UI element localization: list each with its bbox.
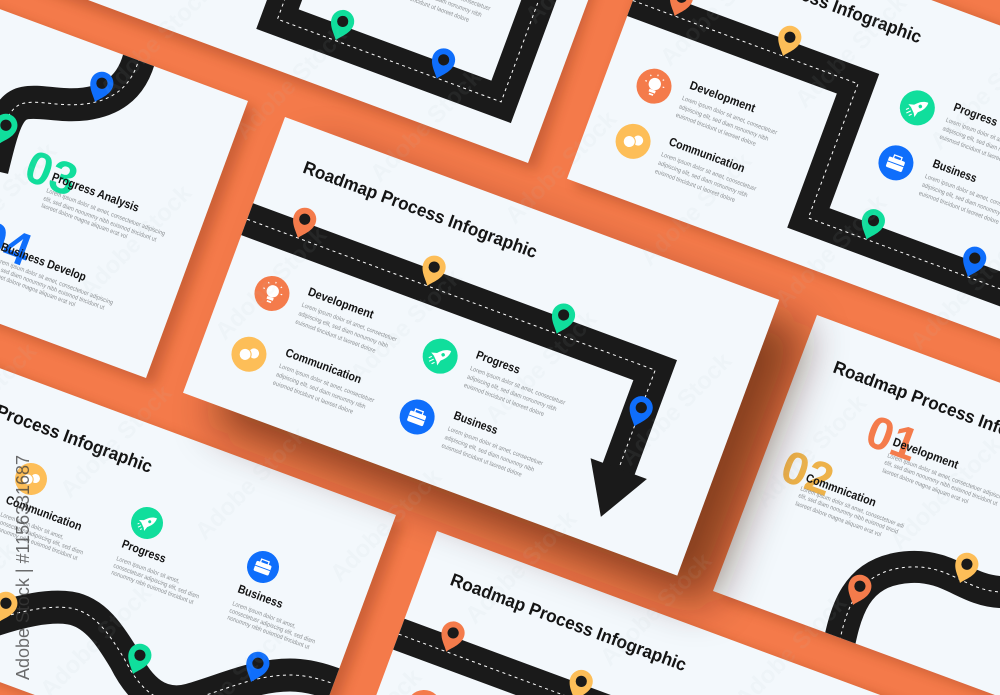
block: business: consectetuer adipiscing elit, sed diam bbox=[228, 607, 316, 645]
text: progress analysis description: Lorem ipsum dolor sit amet, consectetuer adipiscing bbox=[45, 187, 166, 238]
block: progress: Lorem ipsum dolor sit amet, consectetuer bbox=[469, 365, 566, 407]
pin: orange bbox=[664, 0, 696, 20]
pin: yellow bbox=[564, 667, 596, 695]
number 01: 01 bbox=[860, 405, 926, 471]
panel: top right slide bbox=[567, 0, 1000, 362]
pin: yellow bbox=[949, 549, 982, 587]
watermarks: Adobe Stock bbox=[500, 105, 623, 229]
icon: briefcase bbox=[242, 546, 284, 588]
block: progress: nonummy nibh euismod tincidunt ut bbox=[110, 569, 195, 606]
heading: Roadmap Process Infographic bbox=[300, 157, 540, 262]
block: communication: Lorem ipsum dolor sit amet, consectetuer bbox=[278, 363, 375, 404]
block: communication: Communication bbox=[4, 493, 84, 534]
block: communication: Lorem ipsum dolor sit amet, bbox=[0, 511, 65, 541]
watermarks: Adobe Stock bbox=[460, 505, 583, 629]
icon: rocket bbox=[895, 85, 940, 130]
block: development: Development bbox=[306, 284, 376, 321]
watermarks: Adobe Stock bbox=[480, 305, 603, 429]
watermarks: Adobe Stock bbox=[595, 547, 718, 671]
text: development description: laoreet dolore magna aliquam erat vol bbox=[881, 467, 969, 505]
heading: Roadmap Process Infographic bbox=[448, 570, 689, 675]
pin: blue bbox=[240, 648, 273, 686]
panel: left slide bbox=[0, 0, 248, 378]
block: progress: Lorem ipsum dolor sit amet, bbox=[115, 555, 181, 585]
pin: green bbox=[325, 7, 357, 44]
watermarks: Adobe Stock bbox=[55, 379, 178, 503]
number 03: 03 bbox=[19, 140, 85, 206]
panel: top middle slide bbox=[34, 0, 630, 163]
text: commnication description: elit, sed diam nonummy nibh euismod tincid bbox=[797, 492, 900, 536]
winding road bbox=[0, 607, 370, 695]
block: business: Business bbox=[452, 408, 500, 437]
pin: green bbox=[856, 206, 888, 243]
pin: yellow bbox=[772, 23, 805, 60]
pin: blue bbox=[84, 68, 117, 106]
icon: bulb bbox=[249, 271, 294, 316]
block: development: euismod tincidunt ut laoreet dolore bbox=[675, 112, 757, 148]
pin: blue bbox=[426, 45, 458, 83]
block: progress: euismod tincidunt ut laoreet dolore bbox=[463, 382, 545, 418]
text: commnication description: laoreet dolore magna aliquam erat vol bbox=[794, 500, 882, 538]
block: progress: consectetuer adipiscing elit, sed diam bbox=[112, 562, 200, 600]
block: business bbox=[918, 155, 1000, 232]
block: communication: Communication bbox=[667, 134, 747, 175]
block: communication bbox=[272, 345, 382, 421]
pin: orange bbox=[435, 618, 468, 656]
pin: orange bbox=[287, 204, 320, 242]
block: business: Lorem ipsum dolor sit amet, bbox=[231, 600, 297, 630]
text: progress analysis description: laoreet dolore magna aliquam erat vol bbox=[40, 202, 128, 240]
icon: briefcase bbox=[873, 140, 918, 185]
block: communication: euismod tincidunt ut laoreet dolore bbox=[654, 168, 736, 204]
block: business: nonummy nibh euismod tincidunt ut bbox=[226, 614, 311, 651]
heading: development: Development bbox=[891, 435, 961, 472]
watermarks: Adobe Stock bbox=[190, 421, 313, 545]
block: communication: euismod tincidunt ut laoreet dolore bbox=[272, 380, 354, 416]
block: business: Business bbox=[236, 582, 285, 611]
icon: rocket bbox=[418, 334, 463, 379]
watermarks: Adobe Stock bbox=[230, 21, 353, 145]
heading: progress analysis: Progress Analysis bbox=[50, 170, 141, 215]
panel: bottom left slide bbox=[0, 332, 396, 695]
text: commnication description: Lorem ipsum dolor sit amet, consectetuer adi bbox=[799, 485, 905, 530]
block: development bbox=[675, 77, 785, 153]
pin: green bbox=[546, 300, 578, 338]
watermarks: Adobe Stock bbox=[615, 347, 738, 471]
center slide shadow bbox=[213, 147, 809, 606]
block: development: Development bbox=[688, 78, 757, 115]
icon: bulb bbox=[632, 64, 677, 109]
block: communication: adipiscing elit, sed diam nonummy nibh bbox=[275, 371, 367, 411]
icon: briefcase bbox=[395, 394, 440, 439]
icon: chat bbox=[611, 119, 656, 164]
block: business bbox=[226, 582, 316, 651]
block: development: adipiscing elit, sed diam nonummy nibh bbox=[297, 310, 389, 350]
block: development: adipiscing elit, sed diam nonummy nibh bbox=[678, 103, 770, 143]
block: development: Lorem ipsum dolor sit amet, consectetuer bbox=[301, 302, 398, 343]
block: progress bbox=[110, 537, 200, 606]
pin: green bbox=[0, 110, 21, 148]
block: development: Lorem ipsum dolor sit amet, consectetuer bbox=[681, 95, 778, 136]
block: progress bbox=[938, 99, 1000, 175]
watermarks: Adobe Stock bbox=[345, 263, 468, 387]
block: communication: adipiscing elit, sed diam nonummy nibh bbox=[657, 160, 749, 199]
block: communication: Communication bbox=[284, 345, 364, 386]
panel: center slide bbox=[183, 117, 779, 576]
road with arrow bbox=[193, 219, 683, 527]
block: business: Lorem ipsum dolor sit amet, consectetuer bbox=[447, 426, 544, 467]
heading: business develop: Business Develop bbox=[0, 240, 88, 284]
pin: yellow bbox=[0, 588, 21, 626]
heading: commnication: Commnication bbox=[804, 471, 878, 509]
block: progress: Progress bbox=[120, 537, 168, 566]
watermarks: Adobe Stock bbox=[75, 179, 198, 303]
block: communication bbox=[654, 133, 764, 210]
block: business bbox=[440, 408, 550, 484]
block: development: euismod tincidunt ut laoreet dolore bbox=[294, 319, 377, 355]
pin: green bbox=[122, 640, 155, 678]
watermarks: Adobe Stock bbox=[750, 389, 873, 513]
block: development bbox=[294, 284, 404, 360]
road bbox=[583, 1, 1000, 317]
block: business: euismod tincidunt ut laoreet dolore bbox=[440, 442, 523, 479]
watermarks: Adobe Stock bbox=[635, 147, 758, 271]
block: communication: Lorem ipsum dolor sit amet, consectetuer bbox=[660, 151, 757, 193]
stock id text: Adobe Stock | #1156331687 bbox=[13, 455, 33, 680]
pin: blue bbox=[957, 243, 990, 281]
pin: blue bbox=[624, 393, 656, 430]
number 02: 02 bbox=[775, 440, 841, 506]
block: progress: adipiscing elit, sed diam nonummy nibh bbox=[466, 374, 558, 413]
watermarks: Adobe Stock bbox=[325, 463, 448, 587]
road bbox=[399, 634, 893, 695]
watermarks: Adobe Stock bbox=[365, 63, 488, 187]
icon: orange circle bbox=[401, 685, 446, 695]
block: progress bbox=[463, 347, 573, 424]
icon: chat bbox=[226, 332, 271, 377]
winding road bbox=[0, 45, 142, 170]
block: business: Business bbox=[931, 156, 979, 185]
roadmap road and text bbox=[277, 0, 552, 102]
block: business: adipiscing elit, sed diam nonummy nibh bbox=[444, 434, 536, 474]
panel: bottom center slide bbox=[335, 531, 931, 695]
panel: right slide bbox=[713, 315, 1000, 695]
block: communication bbox=[0, 493, 84, 562]
text: progress analysis description: elit, sed diam nonummy nibh euismod tincidunt ut bbox=[42, 195, 157, 244]
watermarks: Adobe Stock bbox=[770, 189, 893, 313]
icon: rocket bbox=[126, 502, 168, 544]
watermarks: Adobe Stock bbox=[210, 221, 333, 345]
winding road bbox=[836, 567, 1000, 660]
pin: orange bbox=[842, 571, 875, 609]
icon: chat bbox=[10, 458, 52, 500]
block: progress: Progress bbox=[474, 348, 522, 377]
pin: yellow bbox=[416, 252, 449, 290]
